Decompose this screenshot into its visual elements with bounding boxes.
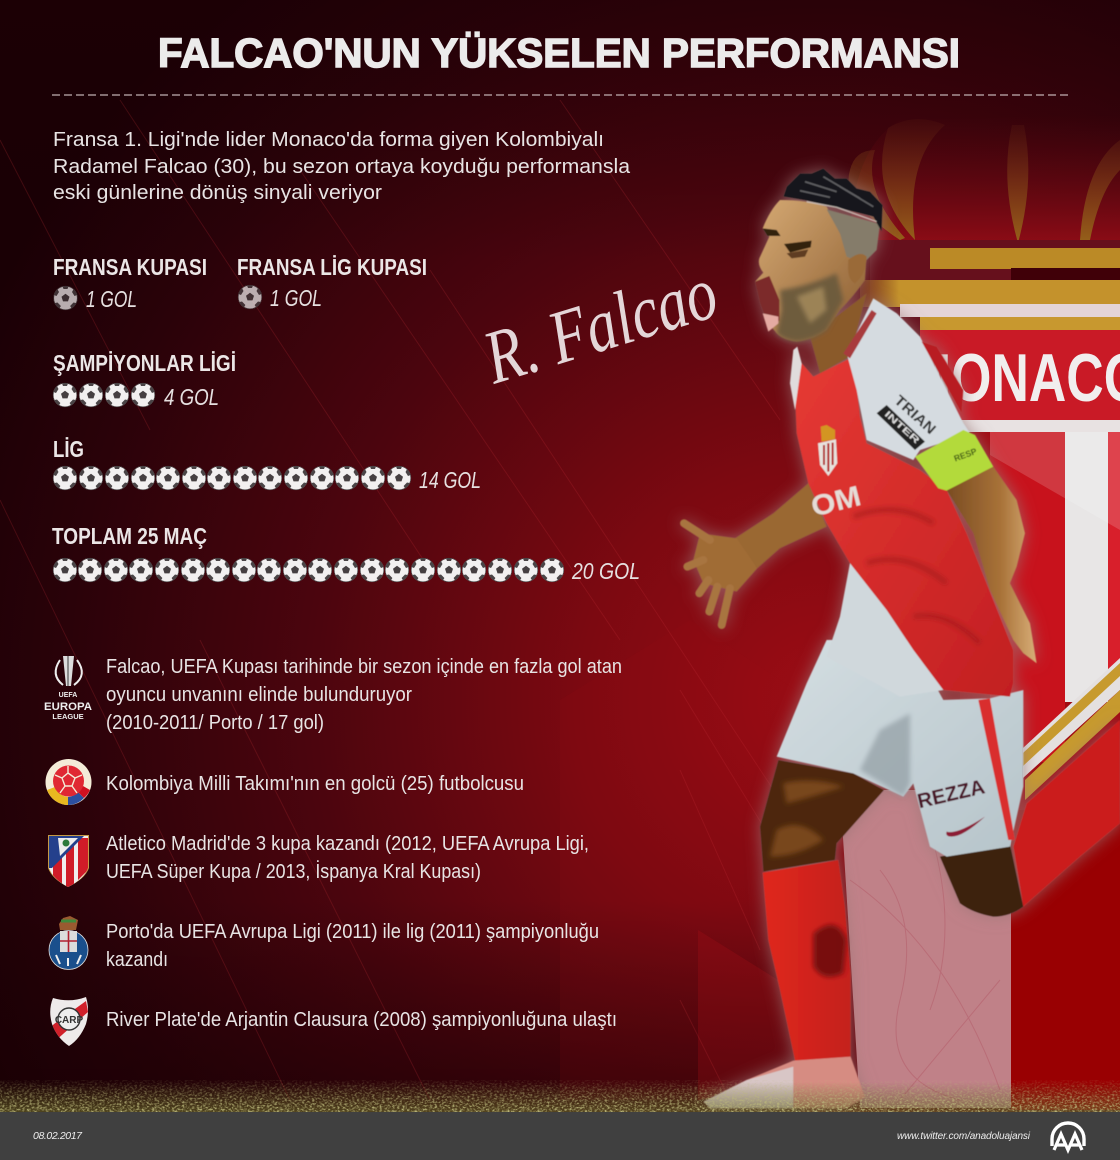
mouth	[755, 276, 779, 323]
head	[755, 200, 867, 342]
logo: AA	[1052, 1123, 1084, 1150]
stat: Fransa Kupası: 1 GOL	[86, 286, 137, 312]
intro text: Radamel Falcao (30), bu sezon ortaya koyduğu performansla	[53, 155, 631, 178]
back leg	[1013, 720, 1120, 907]
intro text: eski günlerine dönüş sinyali veriyor	[53, 181, 382, 204]
torso	[793, 353, 1013, 697]
left arm	[684, 483, 827, 625]
intro text: Fransa 1. Ligi'nde lider Monaco'da forma giyen Kolombiyalı	[53, 128, 604, 151]
icon: Colombia federation	[46, 759, 92, 805]
sleeve	[847, 298, 970, 460]
ear	[848, 254, 867, 283]
shaved side	[827, 209, 880, 263]
text: Europa League record: (2010-2011/ Porto / 17 gol)	[106, 712, 324, 734]
intro text	[53, 128, 631, 204]
stat: Şampiyonlar Ligi: 4 GOL	[164, 384, 219, 410]
sleeve sponsor: TRIAN	[891, 393, 938, 438]
text: Porto: Porto'da UEFA Avrupa Ligi (2011) ile lig (2011) şampiyonluğu	[106, 921, 599, 943]
jersey white side	[827, 563, 943, 697]
stat: Lig: 14 GOL	[419, 467, 481, 493]
text: Europa League record: Falcao, UEFA Kupası tarihinde bir sezon içinde en fazla gol atan	[106, 656, 622, 678]
stat: Şampiyonlar Ligi	[53, 350, 236, 410]
icon: UEFA Europa League	[44, 656, 92, 721]
pale panel	[840, 790, 1011, 1108]
eye and brow	[763, 228, 812, 253]
text: Porto: kazandı	[106, 949, 168, 971]
crest crown	[849, 115, 1120, 250]
shorts	[777, 640, 1023, 857]
player: Falcao	[684, 168, 1120, 1108]
icon: UEFA Europa League: EUROPA	[44, 701, 92, 713]
stat: Fransa Lig Kupası	[237, 254, 427, 311]
upper body: RESP	[953, 446, 978, 464]
stat: Fransa Lig Kupası: FRANSA LİG KUPASI	[237, 254, 427, 280]
text: Europa League record: oyuncu unvanını elinde bulunduruyor	[106, 684, 412, 706]
stat: Toplam 25 maç: 20 GOL	[571, 558, 640, 584]
text: River Plate: River Plate'de Arjantin Clausura (2008) şampiyonluğuna ulaştı	[106, 1009, 617, 1031]
sleeve sponsor: INTER	[883, 409, 922, 446]
stat: Toplam 25 maç: TOPLAM 25 MAÇ	[52, 523, 207, 549]
stat: Lig: LİG	[53, 436, 84, 462]
right arm	[947, 467, 1037, 663]
sleeve sponsor	[877, 393, 938, 450]
text: Atletico Madrid: Atletico Madrid'de 3 kupa kazandı (2012, UEFA Avrupa Ligi,	[106, 833, 589, 855]
crest bands	[860, 240, 1120, 420]
text: Atletico Madrid	[106, 833, 589, 883]
lower body	[703, 640, 1023, 1108]
icon: FC Porto	[49, 916, 88, 970]
icon: River Plate	[50, 997, 88, 1046]
stat: Fransa Kupası: FRANSA KUPASI	[53, 254, 207, 280]
icon: River Plate: CARP	[55, 1015, 83, 1026]
icon: UEFA Europa League: LEAGUE	[52, 712, 84, 721]
crest stripes	[950, 420, 1120, 800]
upper body	[684, 168, 1037, 697]
footer bar	[0, 1112, 1120, 1160]
neck	[810, 293, 867, 373]
hair	[783, 168, 883, 232]
stat: Şampiyonlar Ligi: ŞAMPİYONLAR LİGİ	[53, 350, 236, 376]
stat: Fransa Lig Kupası: 1 GOL	[270, 285, 322, 311]
signature: R. Falcao	[474, 250, 727, 400]
sock	[763, 860, 851, 1061]
front thigh	[760, 760, 884, 872]
icon: Atletico Madrid	[48, 835, 89, 888]
crest: AS Monaco	[840, 115, 1120, 1110]
text: Atletico Madrid: UEFA Süper Kupa / 2013, İspanya Kral Kupası)	[106, 860, 481, 883]
grass strip	[0, 1080, 1120, 1112]
twitter address: www.twitter.com/anadoluajansi	[897, 1131, 1031, 1142]
date: 08.02.2017	[33, 1130, 83, 1142]
lower body: REZZA	[915, 775, 987, 813]
text: Porto	[106, 921, 599, 971]
jersey sponsor: OM	[808, 480, 864, 523]
jersey badge	[818, 439, 837, 476]
stat: Lig	[53, 436, 481, 493]
boot	[703, 1057, 865, 1108]
stat: Toplam 25 maç	[52, 523, 640, 584]
jersey folds	[853, 510, 980, 643]
armband	[915, 430, 993, 491]
text: Europa League record	[106, 656, 622, 734]
title: FALCAO'NUN YÜKSELEN PERFORMANSI	[158, 30, 960, 76]
text: Colombia national team: Kolombiya Milli Takımı'nın en golcü (25) futbolcusu	[106, 773, 524, 795]
back knee	[940, 843, 1023, 917]
icon: UEFA Europa League: UEFA	[59, 692, 77, 699]
beard	[777, 273, 843, 342]
stat: Fransa Kupası	[53, 254, 207, 312]
